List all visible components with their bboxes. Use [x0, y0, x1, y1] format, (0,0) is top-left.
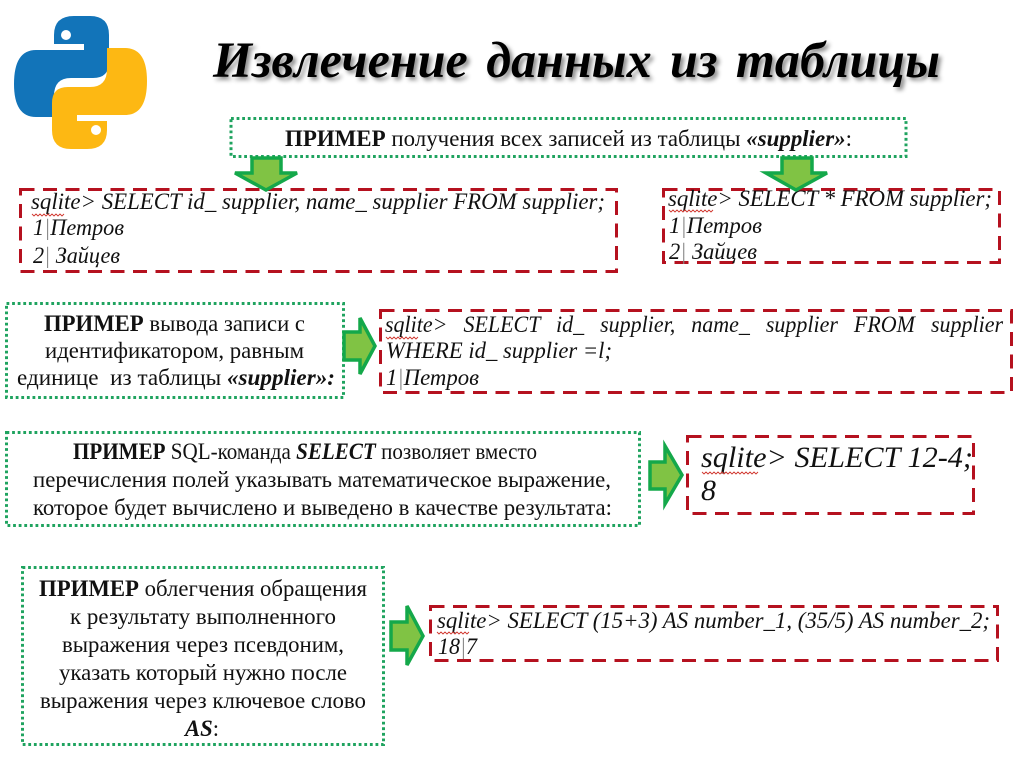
panel: record with id example — [6, 304, 344, 398]
panel: math query: 8 — [701, 474, 716, 507]
panel: select named columns query: 2| Зайцев — [33, 243, 120, 268]
panel: select named columns query — [20, 189, 616, 272]
panel: select named columns query: sqlite> SELECT id_ supplier, name_ supplier FROM supplier; — [31, 189, 605, 214]
panel: where query: 1|Петров — [386, 365, 479, 390]
panel: math expression example: которое будет вычислено и выведено в качестве результата: — [33, 495, 612, 520]
panel: select named columns query: 1|Петров — [33, 215, 124, 240]
panel: alias query: 18|7 — [438, 634, 478, 659]
arrow: to alias query — [391, 606, 423, 665]
arrow: to where query — [344, 318, 375, 374]
panel: select star query: sqlite> SELECT * FROM supplier; — [668, 186, 992, 211]
panel: alias query — [430, 606, 998, 660]
panel: record with id example: идентификатором, равным — [45, 338, 304, 363]
panel: alias example: указать который нужно после — [59, 660, 347, 685]
panel: select star query: 1|Петров — [669, 213, 762, 238]
panel: math expression example: перечисления полей указывать математическое выражение, — [33, 467, 611, 492]
icon: python logo — [14, 16, 147, 149]
arrow: to math query — [650, 446, 682, 504]
panel: alias example: выражения через псевдоним, — [62, 632, 344, 657]
panel: alias example: ПРИМЕР облегчения обращения — [39, 576, 367, 601]
panel: where query — [380, 310, 1012, 392]
arrow: down to select star query — [766, 158, 827, 190]
panel: select star query: 2| Зайцев — [669, 239, 757, 264]
panel: alias example: выражения через ключевое слово — [40, 688, 366, 713]
panel: math query — [688, 436, 974, 514]
panel: alias query: sqlite> SELECT (15+3) AS number_1, (35/5) AS number_2; — [437, 608, 990, 633]
panel: all records example — [231, 118, 906, 156]
panel: where query: sqlite> SELECT id_ supplier, name_ supplier FROM supplier — [385, 312, 1004, 337]
arrow: down to named columns query — [235, 158, 297, 190]
panel: math expression example: ПРИМЕР SQL-команда SELECT позволяет вместо — [73, 439, 537, 464]
panel: record with id example: единице из таблицы «supplier»: — [17, 365, 335, 390]
panel: where query: WHERE id_ supplier =l; — [386, 338, 612, 363]
panel: alias example: AS: — [183, 716, 219, 741]
panel: math expression example — [6, 432, 640, 526]
title: Извлечение данных из таблицы — [212, 33, 940, 89]
panel: record with id example: ПРИМЕР вывода записи с — [44, 311, 305, 336]
panel: select star query — [664, 186, 1000, 264]
panel: alias example: к результату выполненного — [70, 604, 336, 629]
panel: math query: sqlite> SELECT 12-4; — [701, 441, 973, 474]
panel: alias example — [22, 568, 384, 744]
panel: all records example: ПРИМЕР получения всех записей из таблицы «supplier»: — [285, 126, 852, 151]
